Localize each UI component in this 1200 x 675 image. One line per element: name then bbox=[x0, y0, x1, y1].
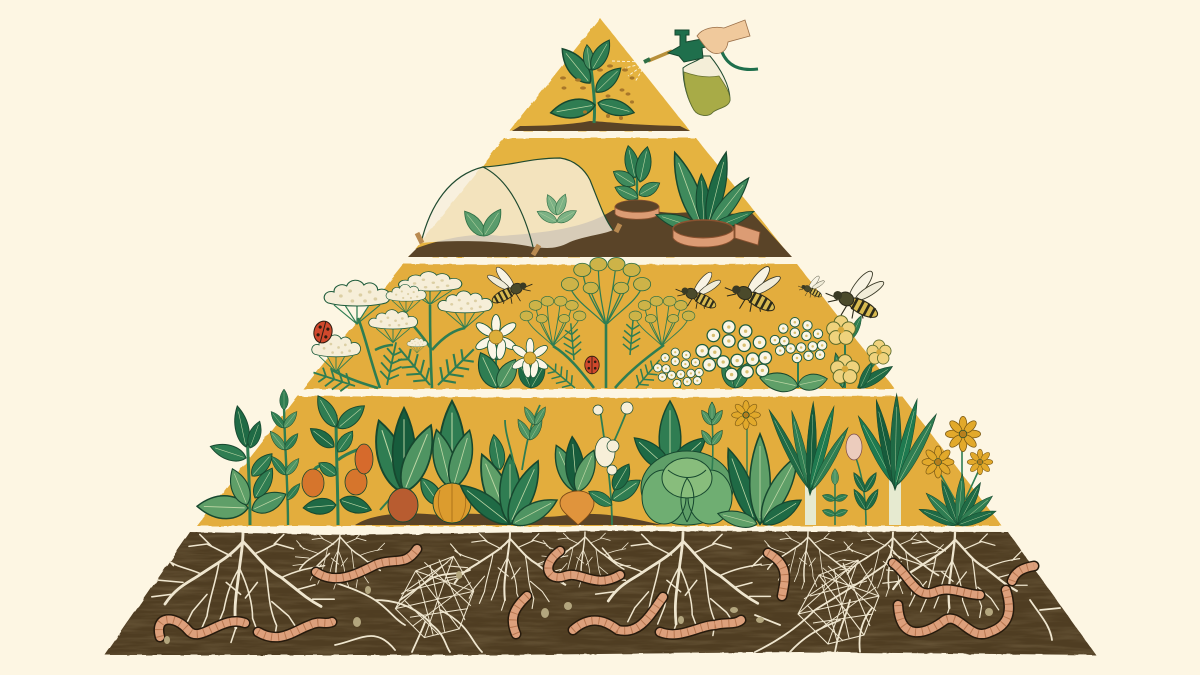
copper ring plant bbox=[610, 144, 663, 219]
soil line bbox=[512, 121, 690, 131]
tomatoes bbox=[302, 444, 373, 497]
plant roots bbox=[152, 532, 1027, 642]
tier 3: beneficial insects and flowers bbox=[303, 258, 895, 396]
fennel bbox=[520, 258, 695, 395]
spray bottle and hand bbox=[644, 20, 758, 115]
tier 2: physical barriers bbox=[408, 138, 792, 257]
mycorrhizal networks bbox=[315, 532, 1060, 652]
tier 4 panel bbox=[197, 396, 1002, 526]
copper ring spinach bbox=[654, 149, 760, 247]
buttercups bbox=[827, 316, 891, 383]
tier 1: targeted spray bbox=[510, 18, 758, 131]
earthworms bbox=[159, 549, 1034, 637]
chard with golden onion bbox=[415, 401, 479, 523]
ladybug on fennel bbox=[585, 356, 599, 374]
broad leaf greens bbox=[454, 450, 561, 532]
treated plant bbox=[549, 37, 636, 123]
soil bed bbox=[408, 210, 792, 257]
bees bbox=[486, 264, 886, 321]
soil mound bbox=[355, 513, 662, 525]
seedlings and net tunnel bbox=[417, 158, 620, 255]
ladybug on yarrow bbox=[311, 319, 335, 345]
flowering herb bbox=[487, 402, 645, 525]
tier 5: living soil bbox=[100, 528, 1100, 658]
small herbs and pink flower bbox=[821, 434, 881, 525]
leek two bbox=[854, 394, 941, 525]
tier 4: healthy crops bbox=[197, 389, 1002, 532]
leek one bbox=[765, 402, 852, 525]
tier 1 panel bbox=[510, 18, 690, 131]
spray droplets bbox=[560, 64, 634, 120]
tier 3 panel bbox=[303, 264, 895, 389]
beet bbox=[548, 436, 602, 525]
chamomile bbox=[472, 314, 550, 392]
tomato plant bbox=[302, 392, 374, 525]
tall herb bbox=[267, 389, 303, 525]
broad leaf plant and herb bbox=[699, 401, 806, 531]
lettuce head bbox=[641, 451, 733, 525]
soil pebbles bbox=[164, 571, 993, 644]
spinach with carrot root bbox=[367, 408, 442, 522]
tier 2 panel bbox=[409, 138, 791, 257]
yarrow bbox=[310, 272, 492, 396]
yellow flowers and grass bbox=[917, 416, 998, 530]
parsley top bbox=[628, 401, 712, 477]
white flower clusters bbox=[654, 314, 895, 395]
carrot top plant bbox=[197, 405, 290, 525]
